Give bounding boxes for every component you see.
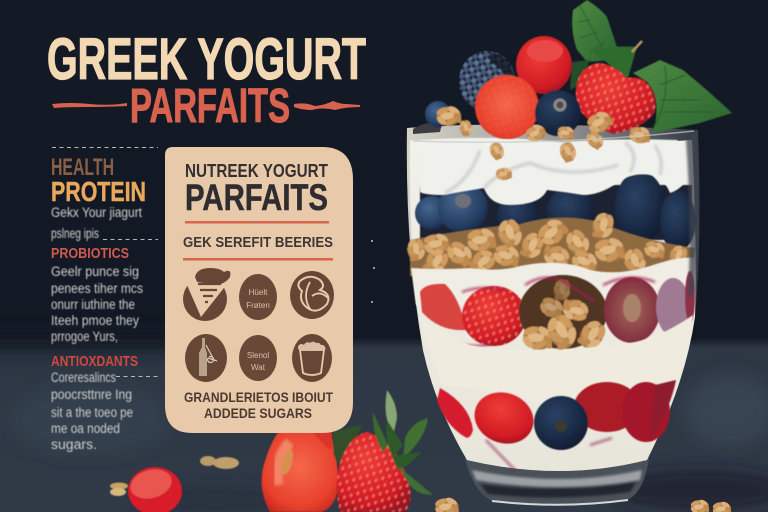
icon: special wat badge: Slenol bbox=[247, 351, 269, 360]
heading: antioxidants: ANTIOXDANTS bbox=[51, 353, 138, 370]
probiotics body bbox=[51, 264, 143, 344]
probiotics body: Geelr punce sig bbox=[51, 264, 139, 279]
berry juice streaks upper bbox=[460, 278, 655, 346]
card footer bbox=[184, 390, 334, 421]
nuts middle bbox=[200, 456, 239, 469]
card subheading: GEK SEREFIT BEERIES bbox=[183, 235, 333, 251]
subtitle: PARFAITS bbox=[130, 80, 290, 133]
granola crumb bbox=[434, 496, 460, 512]
raspberry bbox=[516, 36, 572, 94]
red rule lower bbox=[183, 258, 333, 260]
heading: protein: PROTEIN bbox=[51, 176, 146, 207]
leaf right bbox=[633, 60, 732, 133]
bottom strawberries and crumbs bbox=[110, 390, 732, 512]
dashed rule antioxidants bbox=[116, 376, 158, 378]
antioxidants body: sugars. bbox=[51, 437, 97, 452]
protein body: pslneg ipis bbox=[51, 226, 99, 241]
whole strawberry bbox=[333, 390, 433, 512]
third yogurt band bbox=[421, 315, 693, 403]
icon: bottle bbox=[185, 334, 227, 382]
panel: nutrition card bbox=[165, 147, 353, 433]
heading: probiotics: PROBIOTICS bbox=[51, 245, 129, 262]
glass rim bbox=[413, 131, 694, 142]
icon: parfait cup bbox=[292, 334, 332, 382]
dark leaf behind berry bbox=[570, 60, 590, 90]
glass parfait bbox=[406, 123, 699, 505]
heading: health: HEALTH bbox=[51, 154, 114, 181]
half strawberry bbox=[262, 430, 338, 512]
second yogurt band bbox=[411, 258, 694, 305]
small centre leaf bbox=[590, 46, 637, 78]
card heading: NUTREEK YOGURT bbox=[185, 161, 328, 181]
probiotics body: Iteeh pmoe they bbox=[51, 313, 139, 328]
probiotics body: onurr iuthine the bbox=[51, 297, 135, 312]
card footer: GRANDLERIETOS IBOIUT bbox=[184, 390, 334, 405]
blueberry layer bbox=[415, 171, 696, 251]
stem tip bbox=[632, 41, 642, 52]
antioxidants body: Coreresalincs bbox=[51, 370, 116, 385]
strawberry slice bbox=[127, 465, 182, 512]
icon: special wat badge bbox=[239, 335, 277, 381]
protein body: Gekx Your jiagurt bbox=[51, 205, 142, 220]
probiotics body: prrogoe Yurs, bbox=[51, 329, 118, 344]
topping: berries bbox=[425, 36, 656, 139]
nuts left bbox=[110, 482, 128, 496]
yogurt fill bbox=[410, 140, 696, 471]
top yogurt layer bbox=[418, 138, 689, 205]
blackberry bbox=[459, 51, 515, 111]
glass body bbox=[407, 124, 699, 471]
topping: granola bbox=[435, 104, 653, 181]
icon: high protein badge bbox=[239, 274, 277, 320]
leaf top bbox=[572, 0, 618, 62]
title: GREEK YOGURT bbox=[47, 27, 366, 92]
strawberry front bbox=[475, 75, 539, 139]
granola layer bbox=[406, 208, 695, 281]
title flourish left bbox=[52, 103, 127, 108]
card title: PARFAITS bbox=[185, 177, 328, 218]
strawberry layer lower bbox=[437, 380, 676, 452]
icon: high protein badge: Frøten bbox=[246, 301, 270, 310]
glass base bbox=[465, 458, 649, 505]
right glass edge shade bbox=[686, 134, 698, 300]
antioxidants body: me oa noded bbox=[51, 421, 120, 436]
dashed rule protein bbox=[103, 238, 158, 240]
icon: special wat badge: Wat bbox=[251, 363, 266, 372]
icon: berries outline bbox=[290, 271, 334, 319]
berry juice streaks lower bbox=[486, 438, 612, 470]
strawberry layer upper bbox=[420, 271, 695, 356]
antioxidants body bbox=[51, 370, 133, 452]
table mottling bbox=[0, 330, 768, 512]
small dots right of panel bbox=[371, 240, 375, 303]
antioxidants body: poocrsttnre Ing bbox=[51, 387, 132, 402]
title bbox=[47, 27, 366, 133]
blueberry centre bbox=[535, 90, 581, 136]
yogurt shading bbox=[445, 142, 661, 193]
icon: high protein badge: Hüelt bbox=[249, 288, 268, 297]
red rule top bbox=[185, 221, 329, 224]
icon: yogurt wedge bbox=[183, 268, 230, 321]
left column: health text bbox=[51, 148, 158, 452]
glass rim dark left bbox=[413, 123, 442, 134]
topping: leaves bbox=[570, 0, 732, 133]
blueberry left bbox=[425, 101, 451, 127]
probiotics body: penees tiher mcs bbox=[51, 281, 143, 296]
granola crumb right bbox=[690, 498, 710, 512]
dashed rule top bbox=[52, 146, 158, 148]
title flourish right bbox=[294, 101, 360, 110]
antioxidants body: sit a the toeo pe bbox=[51, 405, 133, 420]
card footer: ADDEDE SUGARS bbox=[204, 406, 312, 421]
big strawberry bbox=[576, 63, 656, 134]
protein body bbox=[51, 205, 142, 241]
